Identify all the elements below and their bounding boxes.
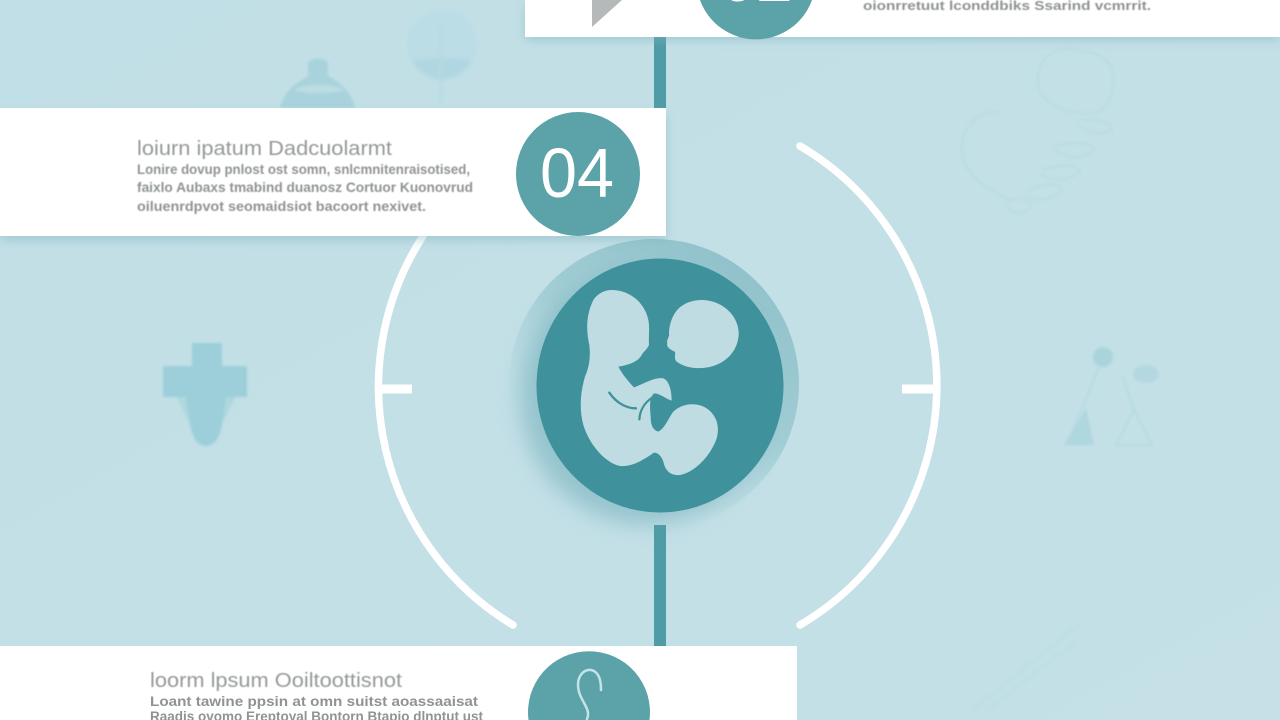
upper connector bar <box>654 36 666 110</box>
number badge 04 <box>516 112 640 236</box>
step 04 body text: oiluenrdpvot seomaidsiot bacoort nexivet. <box>137 199 426 214</box>
icon: faint figures with triangles <box>1064 347 1159 445</box>
icon: faint cross and shield <box>163 343 247 446</box>
step 06 body text: Loant tawine ppsin at omn suitst aoassaaisat <box>150 694 479 709</box>
step 04 body text: Lonire dovup pnlost ost somn, snlcmnitenraisotised, <box>137 162 470 177</box>
medallion ring <box>509 239 799 529</box>
white ring arcs <box>378 146 937 625</box>
step 06 body text <box>150 694 483 720</box>
icon: faint heart and helix <box>962 49 1114 213</box>
medallion shadow <box>521 272 769 524</box>
panel: step 06 <box>0 646 797 720</box>
icon: faint balloon <box>407 10 477 105</box>
icon: grey pointer triangle <box>592 0 622 27</box>
number badge 04: 04 <box>540 134 614 212</box>
central medallion <box>509 239 799 529</box>
lower connector bar <box>654 525 666 646</box>
icon: faint bottle <box>280 58 355 108</box>
step 06 heading: loorm lpsum Ooiltoottisnot <box>150 670 402 692</box>
panel: step 02 <box>525 0 1280 40</box>
icon: fetus silhouette <box>581 290 739 475</box>
step 04 body text: faixlo Aubaxs tmabind duanosz Cortuor Kuonovrud <box>137 180 473 195</box>
step 04 body text <box>137 162 473 214</box>
umbilical cord <box>609 393 657 419</box>
icon: faint syringe <box>970 622 1082 712</box>
number badge with spine icon <box>528 651 650 720</box>
panel: step 04 <box>0 108 666 240</box>
medallion disc <box>536 258 784 512</box>
step 04 heading: loiurn ipatum Dadcuolarmt <box>137 138 392 160</box>
number badge 02 <box>700 0 812 39</box>
